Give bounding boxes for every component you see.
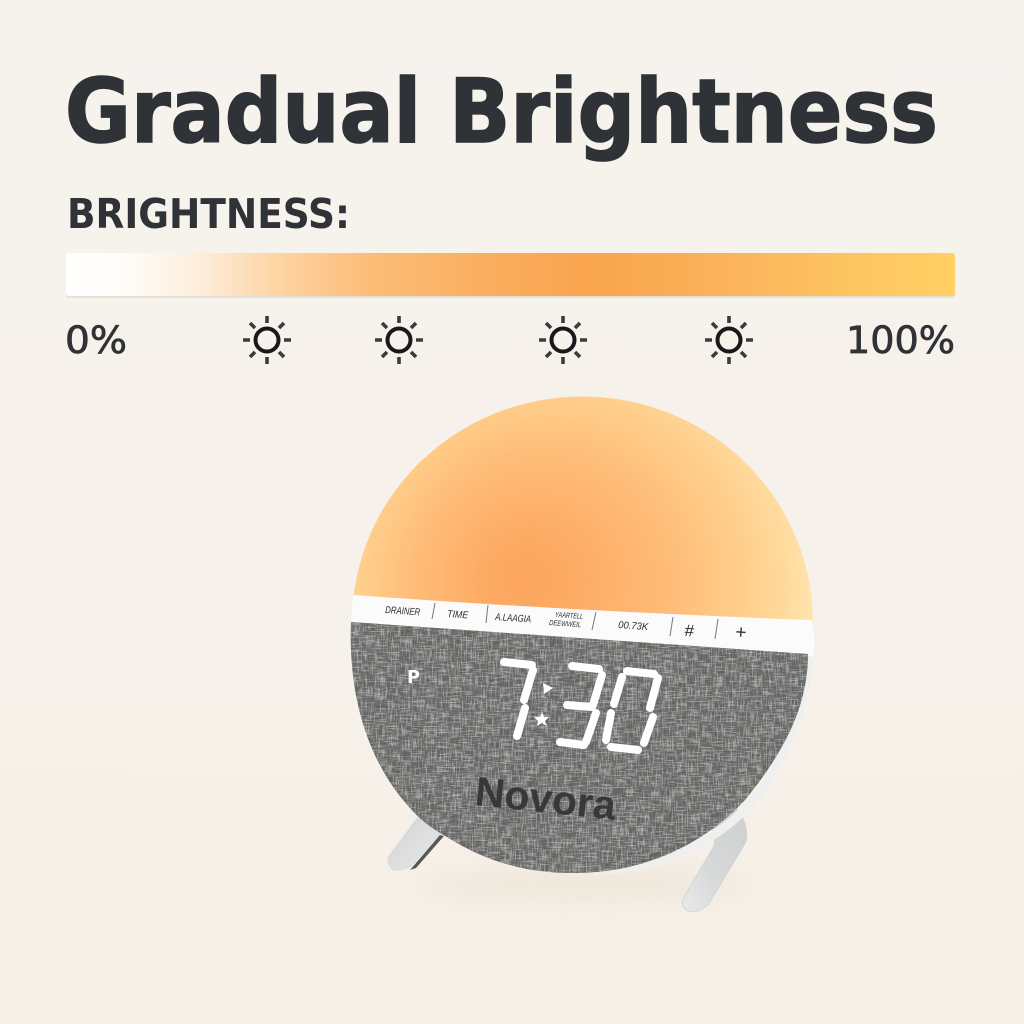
- scale label: 0%: 0%: [65, 319, 127, 362]
- digit 3: [560, 666, 602, 745]
- band labels: [385, 605, 747, 644]
- ground shadow: [415, 869, 755, 901]
- band labels: TIME: [447, 609, 469, 621]
- band labels: YAARTELL: [555, 610, 583, 621]
- brightness gradient bar: [66, 253, 955, 298]
- band dividers: [432, 603, 718, 639]
- glowing dome: [352, 396, 813, 660]
- title: Gradual Brightness: [65, 60, 938, 163]
- band labels: A.LAAGIA: [494, 612, 532, 626]
- band labels: 00.73K: [618, 620, 650, 633]
- digit 0: [606, 671, 658, 750]
- icon: sun level 1: [243, 316, 291, 364]
- scale label: 100%: 100%: [846, 319, 955, 362]
- control band: [351, 595, 814, 658]
- alarm clock product: [340, 396, 820, 912]
- digit 7: [504, 662, 533, 736]
- band labels: DEEWWEIL: [549, 618, 581, 629]
- icon: sun level 3: [539, 316, 587, 364]
- band labels: +: [735, 622, 747, 644]
- clock stand: right leg: [682, 806, 747, 912]
- icon: sun level 4: [705, 316, 753, 364]
- band labels: DRAINER: [385, 605, 420, 618]
- P indicator: P: [407, 667, 420, 688]
- label: brightness: BRIGHTNESS:: [67, 190, 350, 238]
- brand logo: Novora: [473, 768, 619, 829]
- icon: sun level 2: [375, 316, 423, 364]
- white rim: [578, 635, 814, 876]
- band labels: #: [684, 621, 695, 641]
- LED time display 7:30: [504, 662, 658, 750]
- colon marks: [534, 683, 553, 726]
- clock stand: left leg: [388, 817, 444, 870]
- fabric front panel: [350, 622, 808, 873]
